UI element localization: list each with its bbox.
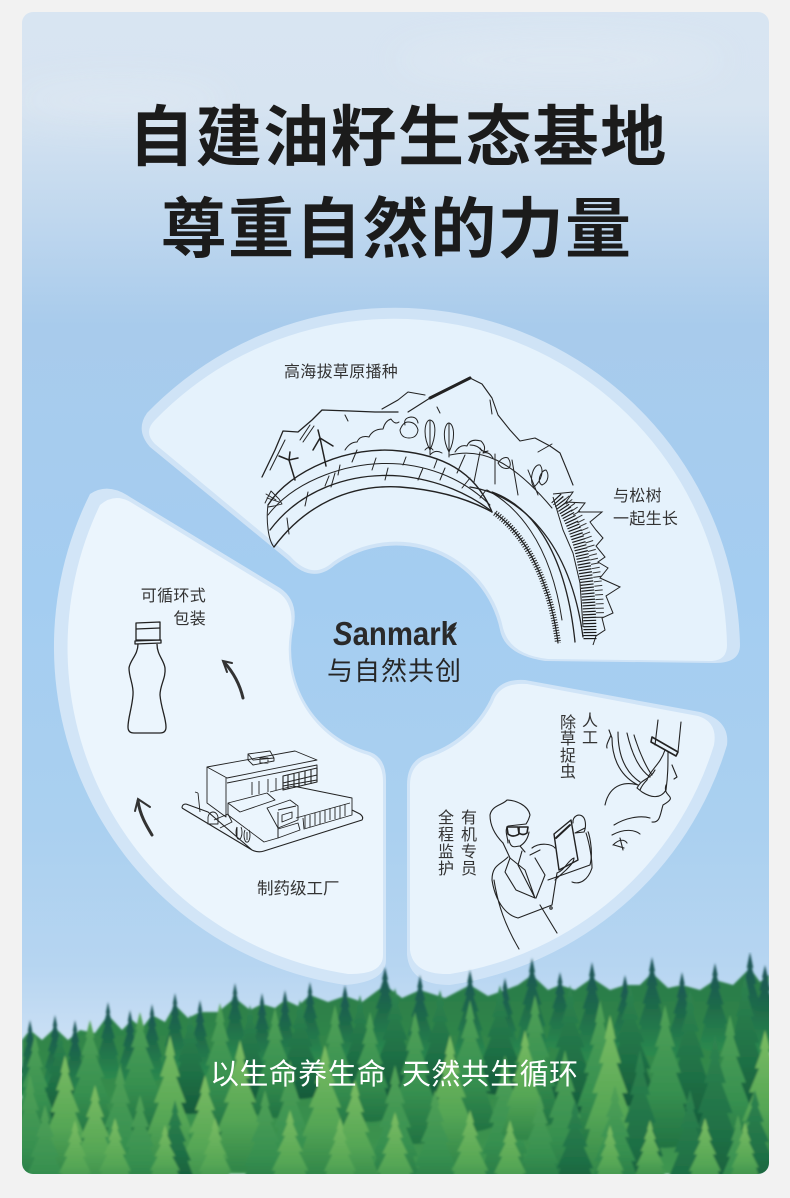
- illustration: hand pulling weeds: [605, 720, 681, 850]
- label: organic staff monitoring: 员: [461, 860, 477, 878]
- label: recyclable packaging: 包装: [173, 610, 206, 628]
- illustration: mountains and terraced fields: [262, 378, 583, 643]
- arrow: to factory: [135, 799, 152, 835]
- wind turbines: [279, 430, 333, 480]
- label: organic staff monitoring: 机: [461, 826, 477, 844]
- label: manual weeding and insect removal: 除: [560, 714, 576, 732]
- label: organic staff monitoring: 全: [438, 809, 454, 827]
- arrow: factory to bottle: [223, 661, 243, 698]
- panel: packaging and factory: [54, 489, 386, 985]
- title: 自建油籽生态基地: [128, 100, 668, 174]
- label: organic staff monitoring: 专: [461, 843, 477, 861]
- forest: [22, 952, 769, 1174]
- label: with pine trees: [613, 487, 678, 528]
- panel: high-altitude planting: [142, 308, 740, 663]
- brand logo: Sanmark: Sanmark: [333, 615, 458, 652]
- icon: leaf on k: [447, 622, 457, 631]
- label: with pine trees: 一起生长: [613, 510, 678, 528]
- label: manual weeding and insect removal: 草: [560, 730, 576, 748]
- slogan: 以生命养生命: [210, 1058, 386, 1091]
- illustration: scientist with clipboard: [490, 800, 592, 949]
- label: recyclable packaging: [141, 587, 206, 628]
- icon: bottle: [128, 622, 166, 733]
- road band right: [470, 487, 583, 637]
- slogan: [210, 1058, 578, 1091]
- tagline: co-create with nature: 与自然共创: [327, 656, 462, 686]
- title: 尊重自然的力量: [161, 192, 632, 266]
- label: manual weeding and insect removal: 虫: [560, 763, 576, 781]
- trees on hill: [425, 420, 548, 487]
- label: organic staff monitoring: 护: [438, 860, 454, 878]
- slogan: 天然共生循环: [402, 1058, 578, 1091]
- road band left: [268, 450, 492, 512]
- label: organic staff monitoring: 监: [438, 843, 454, 861]
- fields and bushes: [450, 452, 552, 508]
- label: pharmaceutical-grade factory: 制药级工厂: [257, 879, 340, 898]
- label: high-altitude sowing: 高海拔草原播种: [284, 363, 398, 381]
- label: recyclable packaging: 可循环式: [141, 587, 206, 605]
- label: manual weeding and insect removal: 捉: [560, 747, 576, 765]
- illustration: factory: [182, 751, 363, 852]
- label: manual weeding and insect removal: 工: [582, 730, 598, 747]
- label: organic staff monitoring: 程: [438, 826, 454, 844]
- illustration: pine trees on slope: [553, 492, 620, 645]
- label: with pine trees: 与松树: [613, 487, 662, 505]
- label: organic staff monitoring: 有: [461, 809, 477, 827]
- label: manual weeding and insect removal: [560, 712, 598, 781]
- panel: organic specialists: [407, 680, 727, 985]
- title: [128, 100, 668, 266]
- label: manual weeding and insect removal: 人: [582, 712, 598, 730]
- label: organic staff monitoring: [438, 809, 477, 878]
